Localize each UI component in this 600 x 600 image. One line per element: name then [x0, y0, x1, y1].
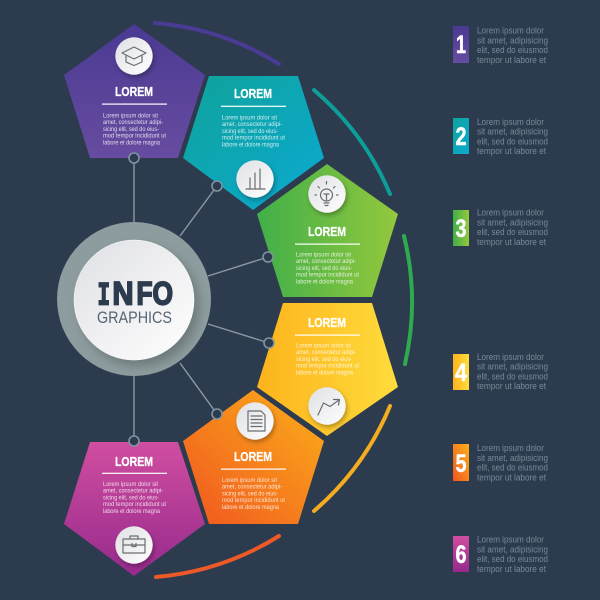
text block [103, 112, 166, 146]
central circle [57, 222, 211, 376]
text block: mod tempor incididunt ut [103, 133, 166, 140]
panel: teal pentagon [183, 76, 324, 210]
text block: labore et dolore magna [296, 369, 353, 376]
text block [103, 481, 166, 515]
text block: labore et dolore magna [222, 504, 279, 511]
text block: amet, consectetur adipi- [103, 119, 163, 126]
icon: light bulb [308, 175, 346, 213]
legend item 5: tempor ut labore et [477, 472, 546, 483]
legend item 6: Lorem ipsum dolor [477, 534, 545, 546]
legend item 1 [453, 26, 548, 66]
text block [296, 252, 359, 285]
panel: magenta pentagon [64, 442, 205, 576]
text block: sicing elit, sed do eius- [103, 494, 159, 501]
legend item 1: sit amet, adipisicing [477, 35, 548, 46]
legend item 5: Lorem ipsum dolor [477, 443, 545, 454]
panel: purple pentagon [64, 24, 205, 158]
text block: mod tempor incididunt ut [222, 497, 285, 504]
heading: LOREM [308, 316, 346, 330]
legend item 6: tempor ut labore et [477, 564, 546, 575]
text block: labore et dolore magna [222, 141, 279, 148]
legend item 1: Lorem ipsum dolor [477, 26, 545, 36]
legend item 2 [453, 117, 548, 157]
legend item 5: elit, sed do eiusmod [477, 463, 548, 474]
legend item 2: tempor ut labore et [477, 146, 546, 157]
icon: bar chart [236, 160, 274, 198]
icon: trend arrow [308, 387, 346, 425]
text block: Lorem ipsum dolor sit [296, 342, 351, 350]
panel: green pentagon [257, 164, 398, 297]
legend item 3: elit, sed do eiusmod [477, 227, 548, 238]
legend item 2: sit amet, adipisicing [477, 127, 548, 138]
heading: LOREM [234, 450, 272, 464]
legend item 1: tempor ut labore et [477, 55, 546, 66]
text block: amet, consectetur adipi- [103, 488, 163, 495]
legend item 4: sit amet, adipisicing [477, 362, 548, 373]
panel: orange pentagon [183, 390, 324, 524]
text block: sicing elit, sed do eius- [222, 490, 278, 497]
text block: mod tempor incididunt ut [222, 135, 285, 142]
heading: LOREM [308, 225, 346, 239]
text block: amet, consectetur adipi- [296, 349, 356, 356]
legend item 5: sit amet, adipisicing [477, 453, 548, 464]
legend item 2: 2 [456, 123, 466, 151]
heading: LOREM [234, 87, 272, 101]
icon: graduation cap [115, 37, 153, 75]
text block: sicing elit, sed do eius- [296, 265, 352, 272]
legend item 1: 1 [456, 31, 466, 59]
text block [296, 342, 359, 376]
title: INFO: F [136, 276, 152, 312]
icon: document [236, 402, 274, 440]
legend item 6: elit, sed do eiusmod [477, 554, 548, 565]
heading: LOREM [115, 85, 153, 99]
title: INFO: O [152, 276, 173, 312]
text block: labore et dolore magna [103, 508, 160, 515]
text block: Lorem ipsum dolor sit [103, 481, 158, 488]
text block [222, 114, 285, 148]
icon: briefcase [115, 526, 153, 564]
text block: Lorem ipsum dolor sit [103, 112, 158, 120]
legend item 6 [453, 534, 548, 575]
connector lines [134, 158, 269, 442]
text block: sicing elit, sed do eius- [296, 356, 352, 363]
legend item 3: sit amet, adipisicing [477, 217, 548, 228]
text block: sicing elit, sed do eius- [222, 128, 278, 135]
text block: Lorem ipsum dolor sit [296, 252, 351, 258]
legend item 4: 4 [455, 359, 467, 387]
outer arcs [155, 23, 412, 577]
legend item 1: elit, sed do eiusmod [477, 45, 548, 56]
text block: amet, consectetur adipi- [296, 258, 356, 265]
text block: Lorem ipsum dolor sit [222, 477, 277, 484]
panel: yellow pentagon [257, 303, 398, 436]
text block: sicing elit, sed do eius- [103, 126, 159, 133]
heading: LOREM [115, 455, 153, 469]
text block: mod tempor incididunt ut [296, 272, 359, 279]
connector dots [129, 153, 274, 446]
legend item 2: elit, sed do eiusmod [477, 136, 548, 147]
text block: amet, consectetur adipi- [222, 121, 282, 128]
legend item 3: 3 [456, 215, 466, 243]
legend item 2: Lorem ipsum dolor [477, 117, 545, 128]
legend item 6: sit amet, adipisicing [477, 544, 548, 555]
legend item 5 [453, 443, 548, 483]
text block [222, 477, 285, 511]
legend item 4 [453, 352, 548, 392]
legend item 4: tempor ut labore et [477, 381, 546, 392]
text block: mod tempor incididunt ut [296, 363, 359, 370]
text block: mod tempor incididunt ut [103, 501, 166, 508]
legend item 4: Lorem ipsum dolor [477, 352, 545, 363]
title: INFO: N [112, 276, 134, 312]
title: INFO: I [98, 278, 110, 314]
legend item 3: Lorem ipsum dolor [477, 208, 545, 218]
legend item 5: 5 [456, 450, 467, 478]
legend item 6: 6 [456, 541, 466, 569]
subtitle: GRAPHICS: GRAPHICS [97, 309, 172, 327]
legend item 3 [453, 208, 548, 248]
text block: Lorem ipsum dolor sit [222, 114, 277, 122]
text block: labore et dolore magna [103, 139, 160, 146]
text block: labore et dolore magna [296, 278, 353, 285]
legend item 4: elit, sed do eiusmod [477, 371, 548, 382]
text block: amet, consectetur adipi- [222, 484, 282, 491]
legend item 3: tempor ut labore et [477, 237, 546, 248]
